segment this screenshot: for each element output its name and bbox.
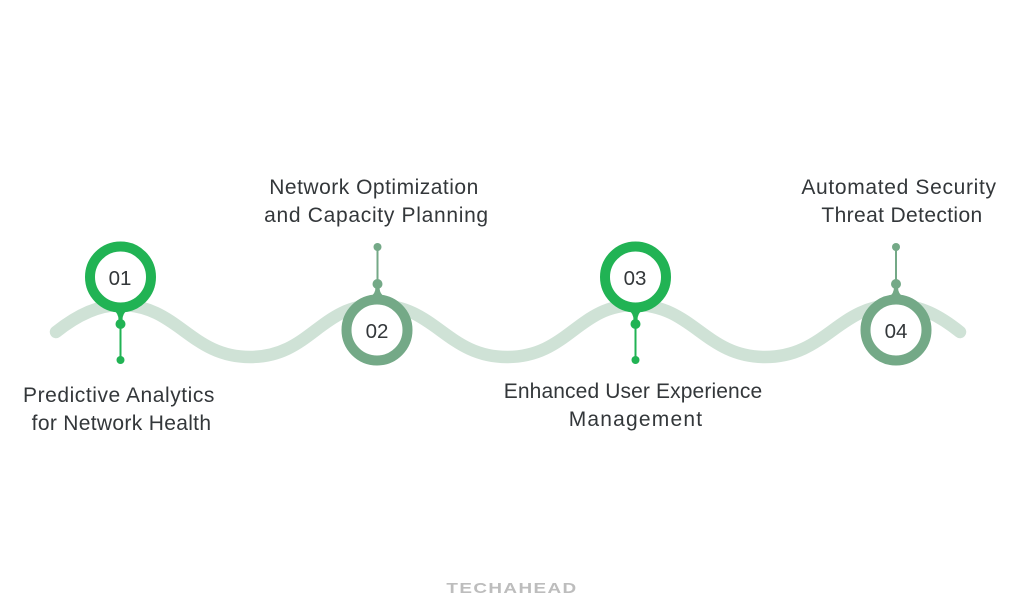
label: Network Optimization: and Capacity Planning	[264, 204, 489, 227]
label: Automated Security	[801, 176, 997, 227]
step 01 marker	[90, 246, 151, 364]
label: Predictive Analytics: for Network Health	[32, 412, 211, 435]
step 02 marker: 02	[366, 320, 388, 343]
step 04 marker: 04	[885, 320, 907, 343]
label: Automated Security: Threat Detection	[821, 204, 983, 227]
step 03 marker	[605, 246, 666, 364]
step 04 marker	[866, 243, 926, 360]
label: Network Optimization	[264, 176, 489, 227]
label: Predictive Analytics: Predictive Analytics	[23, 384, 215, 407]
step 02 marker	[346, 243, 408, 360]
wave path	[56, 305, 960, 357]
label: Enhanced User Experience	[504, 380, 762, 431]
brand wordmark: TECHAHEAD	[446, 580, 578, 597]
step 01 marker: 01	[109, 267, 131, 290]
label: Network Optimization: Network Optimization	[269, 176, 479, 199]
label: Automated Security: Automated Security	[801, 176, 997, 199]
label: Predictive Analytics	[23, 384, 215, 435]
label: Enhanced User Experience: Enhanced User Experience	[504, 380, 762, 403]
label: Enhanced User Experience: Management	[569, 408, 703, 431]
step 03 marker: 03	[624, 267, 646, 290]
